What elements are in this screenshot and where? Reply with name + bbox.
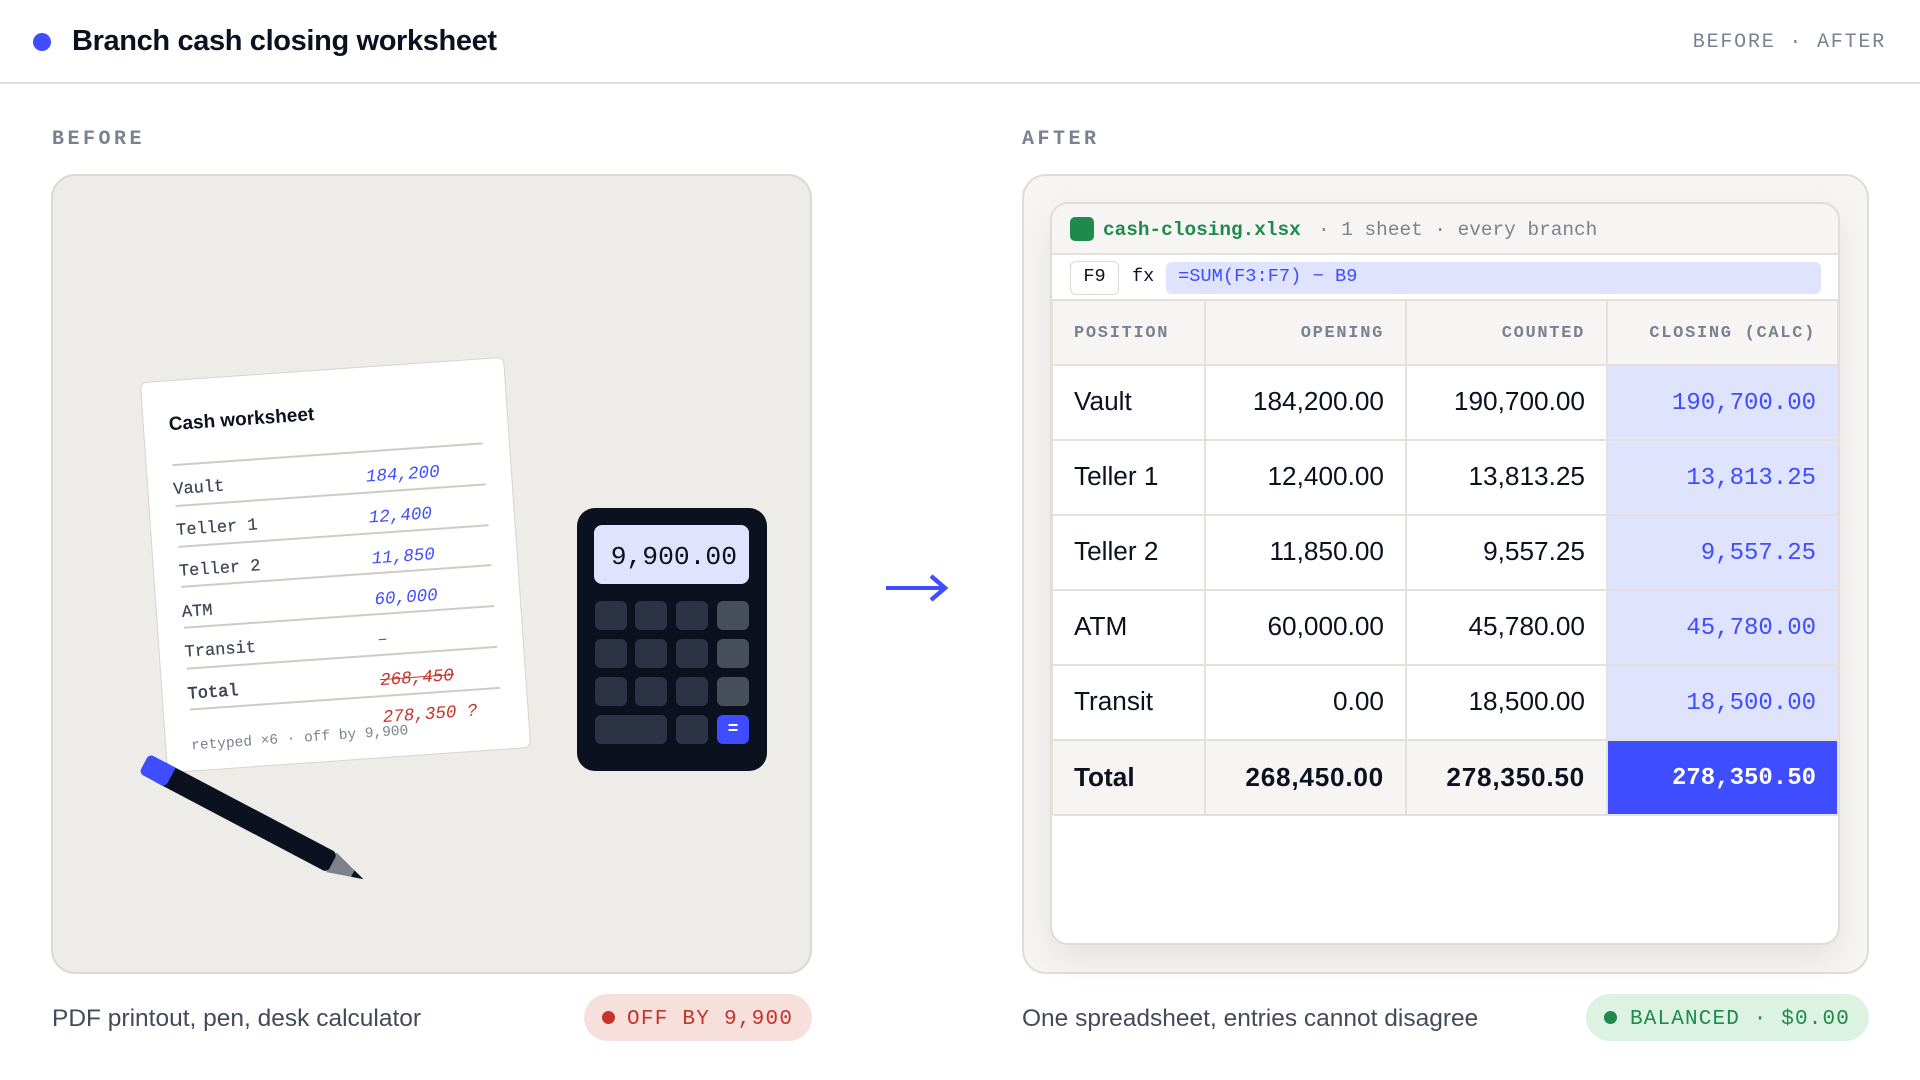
row: transit: [1053, 666, 1206, 741]
opening: teller 2: [1206, 516, 1407, 591]
fx label: fx: [1132, 266, 1154, 287]
closing: transit: 18,500.00: [1686, 690, 1816, 717]
opening: atm: 60,000.00: [1267, 611, 1384, 641]
file details: · 1 sheet · every branch: [1318, 219, 1597, 241]
counted: transit: 18,500.00: [1468, 686, 1585, 716]
row: atm: ATM: [1074, 611, 1127, 641]
icon: green dot: [1604, 1011, 1617, 1024]
calculator keypad: [595, 601, 749, 744]
opening: vault: 184,200.00: [1253, 386, 1384, 416]
row: transit: Transit: [1074, 686, 1153, 716]
closing: teller 2: [1608, 516, 1839, 591]
cell reference: F9: [1083, 266, 1106, 287]
row: total: [1053, 741, 1206, 816]
counted: teller 2: 9,557.25: [1483, 536, 1585, 566]
closing: teller 2: 9,557.25: [1701, 540, 1816, 567]
row: teller 2: Teller 2: [178, 558, 261, 582]
opening: transit: [1206, 666, 1407, 741]
row: atm: ATM: [181, 602, 213, 623]
value: teller 2: 11,850: [371, 545, 435, 570]
calculator display: [594, 525, 749, 584]
row: transit: Transit: [184, 639, 256, 663]
closing: vault: 190,700.00: [1672, 390, 1816, 417]
spreadsheet window: [1050, 202, 1840, 945]
calculator: [577, 508, 767, 771]
row: teller 2: Teller 2: [1074, 536, 1158, 566]
closing: total: 278,350.50: [1672, 765, 1816, 792]
status pill: off by 9,900: [584, 994, 812, 1041]
status pill: balanced: [1586, 994, 1869, 1041]
closing: teller 1: 13,813.25: [1686, 465, 1816, 492]
closing: vault: [1608, 366, 1839, 441]
formula: =SUM(F3:F7) − B9: [1178, 265, 1357, 287]
table header: closing calc: [1608, 301, 1839, 366]
formula: [1166, 262, 1821, 294]
opening: vault: [1206, 366, 1407, 441]
closing: atm: [1608, 591, 1839, 666]
worksheet title: Cash worksheet: [168, 405, 315, 436]
table header: counted: COUNTED: [1502, 324, 1585, 343]
row: teller 1: Teller 1: [1074, 461, 1158, 491]
counted: vault: 190,700.00: [1454, 386, 1585, 416]
caption: after: One spreadsheet, entries cannot disagree: [1022, 1004, 1478, 1032]
table header: closing calc: CLOSING (CALC): [1649, 324, 1816, 343]
row: total: Total: [187, 682, 239, 705]
closing: atm: 45,780.00: [1686, 615, 1816, 642]
opening: atm: [1206, 591, 1407, 666]
pill text: OFF BY 9,900: [627, 1008, 793, 1031]
opening: total: [1206, 741, 1407, 816]
row: vault: [1053, 366, 1206, 441]
value: corrected total: 278,350 ?: [382, 702, 478, 728]
closing: transit: [1608, 666, 1839, 741]
counted: total: 278,350.50: [1446, 762, 1585, 792]
value: atm: 60,000: [374, 586, 438, 611]
icon: spreadsheet file: [1070, 217, 1094, 241]
heading: before: BEFORE: [52, 128, 145, 151]
icon: red dot: [602, 1011, 615, 1024]
panel: before: [51, 174, 812, 974]
counted: transit: [1407, 666, 1608, 741]
row: vault: Vault: [172, 478, 225, 500]
equals key: [717, 715, 749, 744]
footnote: retyped ×6 · off by 9,900: [190, 724, 409, 755]
table header: position: POSITION: [1074, 324, 1169, 343]
counted: atm: [1407, 591, 1608, 666]
heading: after: AFTER: [1022, 128, 1100, 151]
pill text: BALANCED · $0.00: [1630, 1008, 1850, 1031]
header bar: [0, 0, 1920, 84]
table header: opening: OPENING: [1301, 324, 1384, 343]
table header: position: [1053, 301, 1206, 366]
icon: pen: [140, 756, 364, 880]
value: crossed-out total: 268,450: [379, 666, 454, 692]
value: vault: 184,200: [365, 463, 440, 488]
panel: after: [1022, 174, 1869, 974]
row: atm: [1053, 591, 1206, 666]
row: vault: Vault: [1074, 386, 1132, 416]
value: transit: –: [376, 630, 388, 651]
row: teller 2: [1053, 516, 1206, 591]
caption: before: PDF printout, pen, desk calculator: [52, 1004, 421, 1032]
equals key: =: [728, 720, 738, 740]
file name: cash-closing.xlsx: [1103, 219, 1301, 241]
table: [1051, 299, 1839, 815]
value: teller 1: 12,400: [368, 505, 432, 529]
icon: status dot: [33, 33, 51, 51]
header tag: before and after: BEFORE · AFTER: [1693, 31, 1886, 54]
opening: teller 2: 11,850.00: [1269, 536, 1384, 566]
row: teller 1: [1053, 441, 1206, 516]
counted: teller 2: [1407, 516, 1608, 591]
opening: teller 1: [1206, 441, 1407, 516]
file title bar: [1052, 204, 1838, 255]
counted: vault: [1407, 366, 1608, 441]
calculator display: 9,900.00: [611, 542, 737, 572]
counted: teller 1: [1407, 441, 1608, 516]
closing: total: [1608, 741, 1839, 816]
opening: total: 268,450.00: [1245, 762, 1384, 792]
arrow: before to after: [886, 574, 948, 602]
counted: teller 1: 13,813.25: [1468, 461, 1585, 491]
title: Branch cash closing worksheet: [72, 25, 497, 57]
row: total: Total: [1074, 762, 1135, 792]
opening: teller 1: 12,400.00: [1267, 461, 1384, 491]
counted: total: [1407, 741, 1608, 816]
formula bar: [1052, 255, 1838, 301]
closing: teller 1: [1608, 441, 1839, 516]
table header: counted: [1407, 301, 1608, 366]
counted: atm: 45,780.00: [1468, 611, 1585, 641]
cell reference: [1070, 261, 1119, 295]
worksheet printout: [139, 357, 531, 774]
table header: opening: [1206, 301, 1407, 366]
row: teller 1: Teller 1: [175, 517, 258, 541]
opening: transit: 0.00: [1333, 686, 1384, 716]
